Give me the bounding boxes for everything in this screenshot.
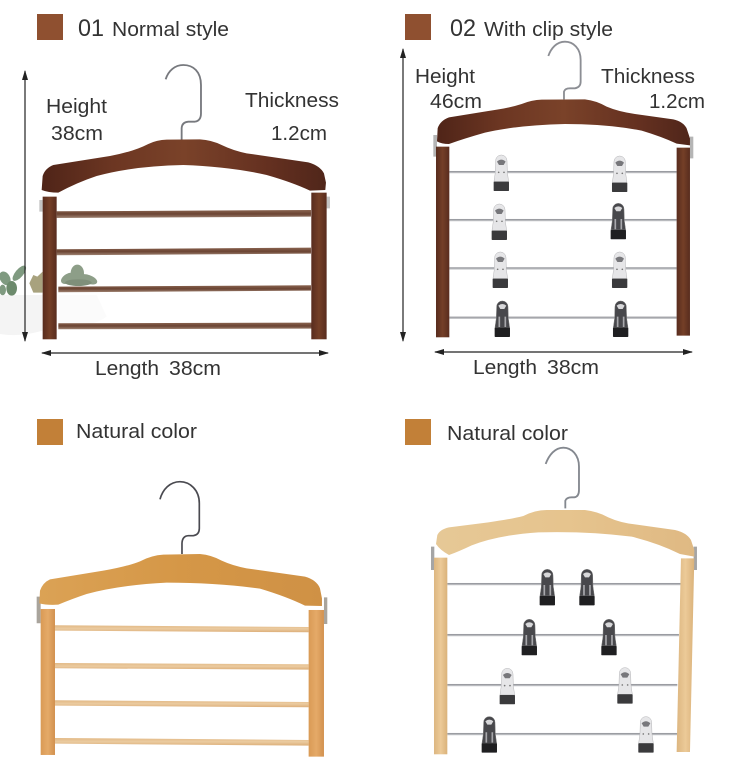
heading: 01 Normal style: 01 [78, 15, 104, 42]
arrow: height 38cm [24, 71, 26, 341]
hook [160, 482, 199, 554]
heading: 02 With clip style: 02 [450, 15, 476, 42]
uprights [431, 547, 697, 754]
hook [166, 65, 201, 140]
label: length 38cm [95, 358, 221, 380]
arrow: length 38cm [435, 351, 692, 353]
uprights [433, 135, 693, 337]
panel: natural clip hanger [431, 448, 697, 754]
label: length 38cm [473, 357, 599, 379]
panel: natural normal hanger [37, 482, 327, 757]
uprights [37, 597, 327, 757]
label: length 38cm: 38cm [547, 357, 599, 379]
hook [546, 448, 579, 508]
panel: walnut clip hanger [433, 42, 693, 337]
clips [492, 155, 628, 337]
label: length 38cm: Length [473, 357, 537, 379]
label: length 38cm: Length [95, 358, 159, 380]
heading: natural color left: Natural color [76, 421, 197, 443]
label: 46cm: 46cm [430, 91, 482, 113]
heading: natural color right: Natural color [447, 423, 568, 445]
heading: 01 Normal style: Normal style [112, 19, 229, 41]
rails [57, 210, 312, 329]
label: 1.2cm: 1.2cm [271, 123, 327, 145]
panel: walnut normal hanger [0, 65, 330, 339]
shoulder bar [42, 139, 326, 193]
shoulder bar [436, 510, 694, 557]
label: 1.2cm: 1.2cm [649, 91, 705, 113]
uprights [39, 193, 330, 339]
label: thickness: Thickness [601, 66, 695, 88]
swatch: natural color right [405, 419, 431, 445]
wires [447, 583, 681, 735]
hook [548, 42, 581, 99]
clips [482, 569, 654, 753]
arrow: height 46cm [402, 49, 404, 341]
shoulder bar [437, 99, 690, 145]
label: 38cm height: 38cm [51, 123, 103, 145]
arrow: length 38cm [42, 352, 328, 354]
heading: 02 With clip style: With clip style [484, 19, 613, 41]
label: height: Height [415, 66, 475, 88]
succulent plant and pot [0, 264, 107, 335]
shoulder bar [39, 554, 322, 606]
heading: 02 With clip style [450, 15, 613, 42]
heading: 01 Normal style [78, 15, 229, 42]
label: height: Height [46, 96, 107, 118]
rails [55, 625, 309, 746]
label: thickness: Thickness [245, 90, 339, 112]
swatch: walnut style 01 [37, 14, 63, 40]
label: length 38cm: 38cm [169, 358, 221, 380]
swatch: natural color left [37, 419, 63, 445]
swatch: walnut style 02 [405, 14, 431, 40]
wires [449, 171, 677, 319]
